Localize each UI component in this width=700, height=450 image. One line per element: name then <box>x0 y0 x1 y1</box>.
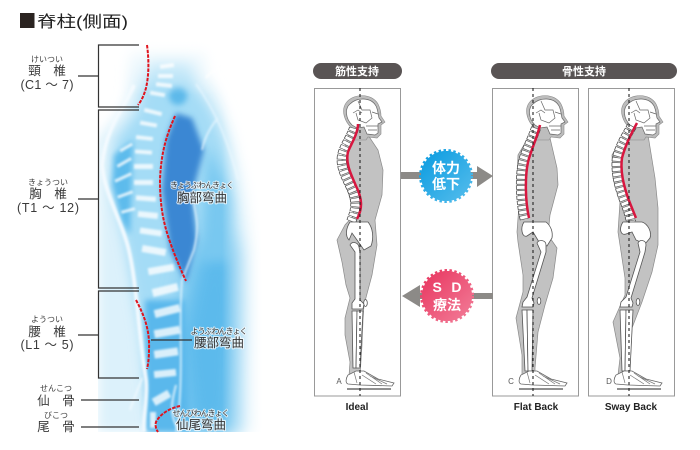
x-ray spine illustration <box>98 30 256 432</box>
badge: weakened strength: 低下 <box>432 176 460 192</box>
ground line <box>347 388 391 390</box>
label: lumbar curve <box>190 327 248 350</box>
skull <box>622 96 663 140</box>
foot <box>614 371 662 386</box>
label: cervical: 頸 椎 <box>28 64 66 78</box>
ground line <box>617 388 661 390</box>
spine <box>342 124 361 222</box>
pelvis and leg bones <box>346 222 373 368</box>
letter D: D <box>606 377 612 386</box>
foot <box>346 371 394 386</box>
arrow: to skeletal support <box>401 166 493 187</box>
label: sacrococcygeal curve: せんびわんきょく <box>172 409 230 418</box>
pill: skeletal support: 骨性支持 <box>562 64 606 78</box>
spine <box>617 123 637 222</box>
label: thoracic <box>17 178 79 215</box>
body silhouette <box>516 125 558 375</box>
bracket: cervical <box>78 45 139 107</box>
caption: Sway Back: Sway Back <box>605 402 658 413</box>
label: lumbar: 腰 椎 <box>28 325 66 339</box>
pelvis and leg bones <box>522 222 552 371</box>
pelvis and leg bones <box>620 222 651 371</box>
label: thoracic curve: 胸部弯曲 <box>177 190 227 205</box>
label: sacrum <box>37 384 75 408</box>
label: thoracic curve: きょうぶわんきょく <box>170 181 234 190</box>
arrow: back to muscular support <box>402 285 493 307</box>
label: coccyx <box>37 411 75 434</box>
panel: flat back <box>492 88 578 396</box>
skull <box>527 96 568 140</box>
label: coccyx: 尾 骨 <box>37 420 75 434</box>
bracket: lumbar <box>78 291 139 378</box>
caption: Flat Back: Flat Back <box>514 402 559 413</box>
badge: weakened strength: 体力 <box>432 160 460 176</box>
plumb line <box>628 88 630 396</box>
label: cervical <box>20 55 74 92</box>
label: lumbar <box>20 315 74 352</box>
letter C: C <box>508 377 514 386</box>
foot <box>519 371 567 386</box>
leader lines <box>81 340 192 427</box>
label: thoracic curve <box>170 181 234 205</box>
label: sacrum: 仙 骨 <box>37 394 75 408</box>
label: cervical: (C1 ～ 7) <box>20 78 74 92</box>
skull <box>344 96 385 140</box>
plumb line <box>532 88 534 396</box>
label: sacrococcygeal curve: 仙尾弯曲 <box>176 418 226 432</box>
title <box>20 13 128 31</box>
label: coccyx: びこつ <box>44 411 68 420</box>
label: cervical: けいつい <box>31 55 63 64</box>
panel: sway back <box>588 88 674 396</box>
label: lumbar curve: ようぶわんきょく <box>190 327 248 336</box>
label: thoracic: (T1 ～ 12) <box>17 201 79 215</box>
label: thoracic: きょうつい <box>28 178 68 187</box>
pill: muscular support <box>313 63 402 79</box>
letter A: A <box>336 377 342 386</box>
bracket: thoracic <box>78 110 139 288</box>
label: sacrum: せんこつ <box>40 384 72 393</box>
title: 脊柱(側面) <box>37 13 128 31</box>
label: thoracic: 胸 椎 <box>29 186 67 201</box>
badge: SD therapy <box>422 271 472 321</box>
caption: Ideal: Ideal <box>346 402 369 413</box>
label: lumbar: (L1 ～ 5) <box>20 338 74 352</box>
panel: ideal posture <box>314 88 400 396</box>
badge: SD therapy: S D <box>432 279 462 295</box>
ground line <box>519 388 563 390</box>
pill: muscular support: 筋性支持 <box>335 64 379 78</box>
red dashed curves <box>136 45 186 432</box>
label: sacrococcygeal curve <box>172 409 230 432</box>
label: lumbar: ようつい <box>31 315 63 324</box>
badge: SD therapy: 療法 <box>433 297 461 313</box>
plumb line <box>359 88 361 396</box>
spine <box>521 125 540 220</box>
pill: skeletal support <box>491 63 677 79</box>
body silhouette <box>337 125 383 376</box>
label: lumbar curve: 腰部弯曲 <box>194 336 244 350</box>
body silhouette <box>612 125 658 375</box>
badge: weakened strength <box>421 151 471 201</box>
